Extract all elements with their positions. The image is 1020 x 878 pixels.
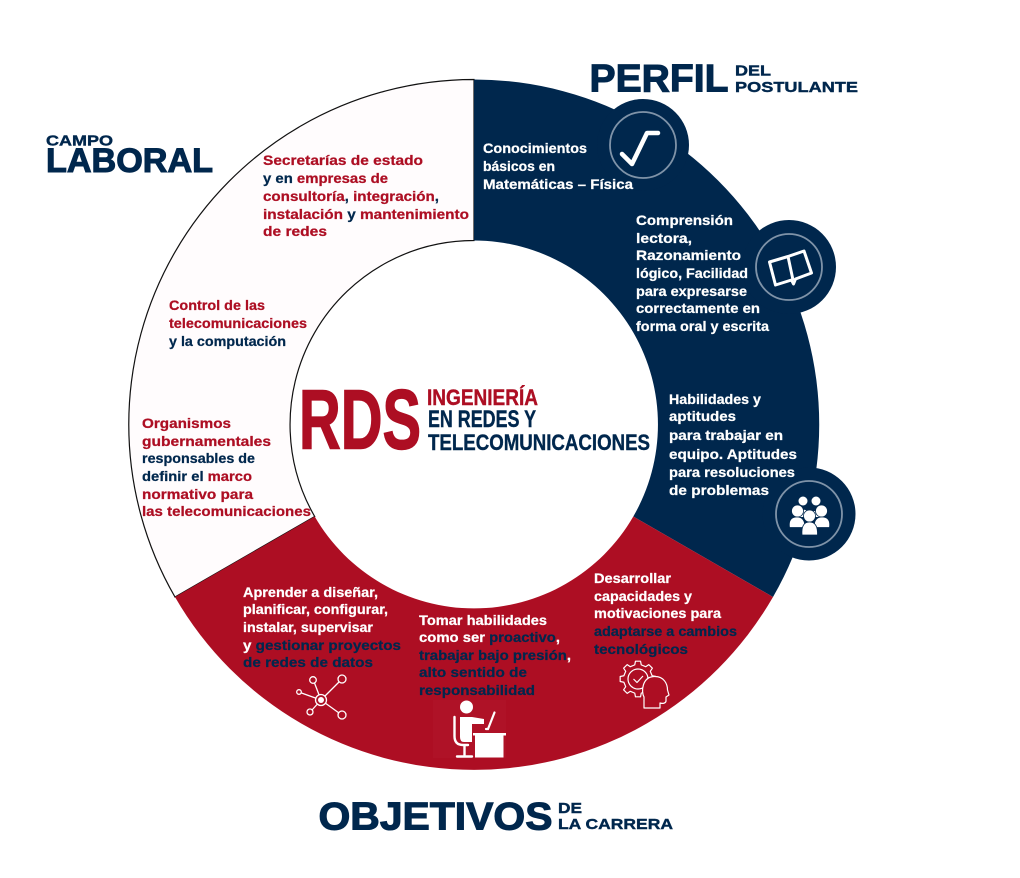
text: organismos gubernamentales: gubernamentales bbox=[142, 433, 271, 449]
text: habilidades y aptitudes: Habilidades y bbox=[669, 391, 761, 407]
text: organismos gubernamentales: las telecomunicaciones bbox=[142, 503, 311, 519]
title: objetivos de la carrera: DE bbox=[558, 800, 582, 817]
text: tomar habilidades bbox=[419, 612, 571, 698]
text: aprender a diseñar: y gestionar proyectos bbox=[243, 637, 401, 653]
text: tomar habilidades: trabajar bajo presión , bbox=[419, 647, 571, 663]
text: habilidades y aptitudes: para resoluciones bbox=[669, 464, 795, 480]
text: organismos gubernamentales: responsables de bbox=[142, 450, 255, 466]
icon: square root bbox=[610, 112, 676, 178]
text: conocimientos básicos bbox=[483, 140, 633, 192]
text: organismos gubernamentales bbox=[142, 415, 311, 519]
title: objetivos de la carrera: OBJETIVOS bbox=[318, 796, 552, 838]
text: control de las telecomunicaciones: Control de las bbox=[169, 297, 265, 313]
text: tomar habilidades: responsabilidad bbox=[419, 682, 535, 698]
text: control de las telecomunicaciones: y la computación bbox=[169, 333, 286, 349]
text: comprensión lectora bbox=[636, 212, 769, 334]
title: perfil del postulante bbox=[590, 58, 858, 100]
text: comprensión lectora: lectora, bbox=[636, 230, 692, 246]
panel: objetivos de la carrera segment bbox=[175, 516, 773, 770]
center title: RDS ingeniería en redes y telecomunicaciones: EN REDES Y bbox=[428, 406, 536, 433]
icon: network nodes bbox=[297, 675, 346, 719]
text: desarrollar capacidades: tecnológicos bbox=[594, 641, 688, 657]
panel: campo laboral segment bbox=[129, 79, 474, 597]
text: comprensión lectora: para expresarse bbox=[636, 283, 747, 299]
text: secretarías de estado: y en empresas de bbox=[263, 170, 388, 186]
text: comprensión lectora: Comprensión bbox=[636, 212, 733, 228]
text: aprender a diseñar: instalar, supervisar bbox=[243, 619, 374, 635]
title: perfil del postulante: DEL bbox=[735, 64, 771, 80]
title: campo laboral: CAMPO bbox=[46, 132, 113, 150]
icon: team of people bbox=[776, 481, 842, 547]
text: tomar habilidades: como ser proactivo , bbox=[419, 629, 560, 645]
text: desarrollar capacidades: Desarrollar bbox=[594, 570, 672, 586]
text: comprensión lectora: correctamente en bbox=[636, 300, 760, 316]
text: aprender a diseñar: planificar, configurar, bbox=[243, 601, 388, 617]
text: control de las telecomunicaciones: telecomunicaciones bbox=[169, 315, 307, 331]
center title: RDS ingeniería en redes y telecomunicaciones: INGENIERÍA bbox=[427, 385, 538, 410]
text: conocimientos básicos: básicos en bbox=[483, 158, 555, 174]
text: secretarías de estado: Secretarías de estado bbox=[263, 152, 423, 168]
icon: gear and head bbox=[620, 661, 669, 708]
text: secretarías de estado: instalación y mantenimiento bbox=[263, 206, 469, 222]
text: aprender a diseñar: Aprender a diseñar, bbox=[243, 584, 378, 600]
text: desarrollar capacidades: adaptarse a cambios bbox=[594, 623, 737, 639]
icon: open book bbox=[756, 234, 822, 300]
text: desarrollar capacidades: motivaciones para bbox=[594, 605, 721, 621]
text: secretarías de estado: de redes bbox=[263, 223, 327, 239]
title: perfil del postulante: PERFIL bbox=[590, 58, 728, 100]
center title: RDS ingeniería en redes y telecomunicaciones: RDS bbox=[299, 372, 421, 466]
text: organismos gubernamentales: definir el marco bbox=[142, 468, 252, 484]
icon: person at desk bbox=[433, 700, 506, 758]
text: habilidades y aptitudes bbox=[669, 391, 797, 498]
text: secretarías de estado: consultoría , integración , bbox=[263, 188, 439, 204]
text: comprensión lectora: forma oral y escrita bbox=[636, 318, 769, 334]
text: desarrollar capacidades: capacidades y bbox=[594, 588, 692, 604]
text: conocimientos básicos: Matemáticas – Física bbox=[483, 176, 633, 192]
text: tomar habilidades: alto sentido de bbox=[419, 664, 527, 680]
text: tomar habilidades: Tomar habilidades bbox=[419, 612, 547, 628]
text: comprensión lectora: lógico, Facilidad bbox=[636, 265, 748, 281]
title: campo laboral: LABORAL bbox=[46, 142, 213, 180]
center title: RDS ingeniería en redes y telecomunicaciones: TELECOMUNICACIONES bbox=[428, 430, 650, 455]
panel: perfil del postulante segment bbox=[474, 79, 856, 597]
text: habilidades y aptitudes: aptitudes bbox=[669, 408, 736, 424]
title: objetivos de la carrera: LA CARRERA bbox=[558, 816, 673, 833]
title: objetivos de la carrera bbox=[318, 796, 673, 838]
text: habilidades y aptitudes: de problemas bbox=[669, 482, 769, 498]
text: secretarías de estado bbox=[263, 152, 469, 239]
text: aprender a diseñar bbox=[243, 584, 401, 670]
text: desarrollar capacidades bbox=[594, 570, 737, 657]
text: habilidades y aptitudes: equipo. Aptitudes bbox=[669, 446, 797, 462]
title: perfil del postulante: POSTULANTE bbox=[735, 79, 858, 96]
text: habilidades y aptitudes: para trabajar en bbox=[669, 427, 783, 443]
text: organismos gubernamentales: Organismos bbox=[142, 415, 231, 431]
text: conocimientos básicos: Conocimientos bbox=[483, 140, 587, 156]
text: control de las telecomunicaciones bbox=[169, 297, 307, 349]
text: organismos gubernamentales: normativo para bbox=[142, 486, 253, 502]
center title: RDS ingeniería en redes y telecomunicaciones bbox=[299, 372, 650, 466]
text: comprensión lectora: Razonamiento bbox=[636, 247, 741, 263]
text: aprender a diseñar: de redes de datos bbox=[243, 654, 373, 670]
